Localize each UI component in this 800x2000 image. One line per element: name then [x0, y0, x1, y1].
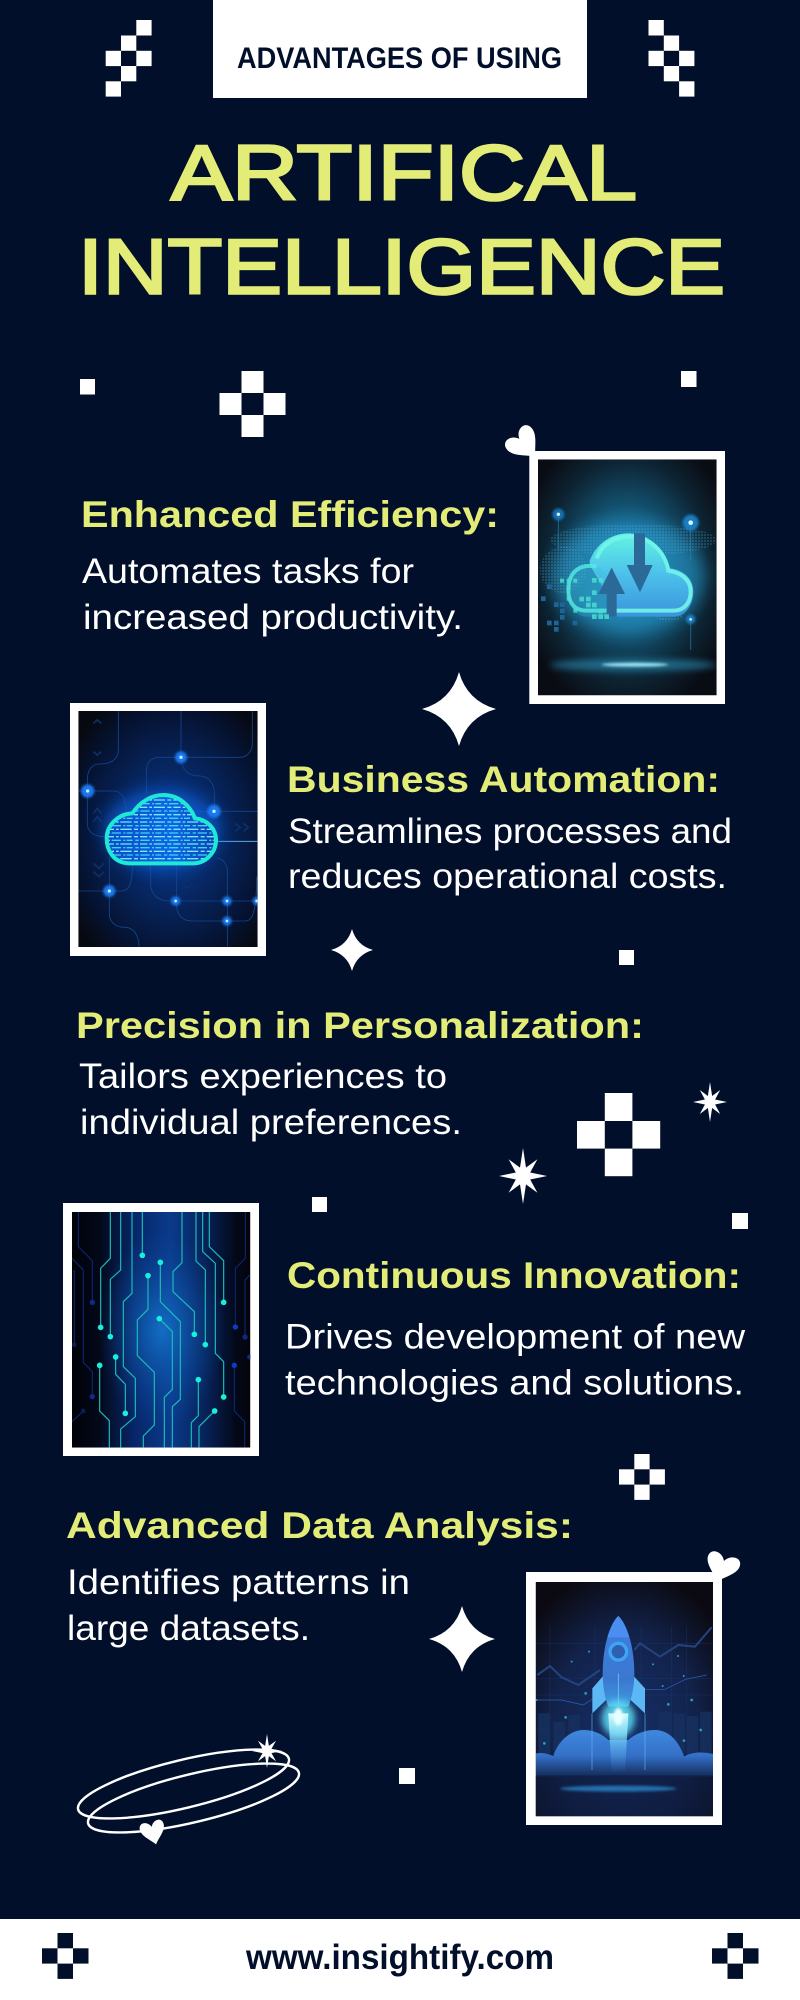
- text block: reduces operational costs.: [288, 857, 727, 896]
- icon: pixel cross: [220, 371, 286, 437]
- panel: advanced data analysis: [66, 1505, 742, 1825]
- icon: pixel cross small: [619, 1454, 665, 1500]
- panel: precision in personalization: [76, 1005, 644, 1142]
- panel: enhanced efficiency: [81, 422, 725, 704]
- title: ARTIFICAL: [171, 129, 637, 217]
- decorative square: [80, 379, 95, 394]
- text block: Automates tasks for: [82, 552, 414, 591]
- decorative four-point star: [331, 929, 373, 971]
- text block: large datasets.: [67, 1609, 310, 1648]
- image: circuit board: [63, 1203, 259, 1456]
- icon: footer pixel cross left: [42, 1933, 88, 1979]
- image: rocket launch: [526, 1572, 722, 1825]
- text block: Streamlines processes and: [288, 812, 732, 851]
- heading: Precision in Personalization:: [76, 1005, 644, 1046]
- heading: Advanced Data Analysis:: [66, 1505, 573, 1546]
- text block: individual preferences.: [80, 1103, 462, 1142]
- decorative eight-point star: [693, 1082, 727, 1122]
- decorative square: [619, 950, 634, 965]
- heading: Business Automation:: [287, 759, 720, 800]
- text block: technologies and solutions.: [285, 1364, 744, 1402]
- text block: [285, 1318, 746, 1402]
- footer url: www.insightify.com: [245, 1938, 554, 1977]
- heading: Enhanced Efficiency:: [81, 494, 499, 535]
- text block: Identifies patterns in: [67, 1563, 410, 1602]
- text block: Tailors experiences to: [79, 1057, 447, 1096]
- decorative four-point star: [422, 672, 496, 746]
- banner text: ADVANTAGES OF USING: [237, 42, 562, 75]
- icon: footer pixel cross right: [712, 1933, 758, 1979]
- icon: pixel cross: [577, 1093, 660, 1176]
- heading: Continuous Innovation:: [287, 1255, 741, 1296]
- icon: pixel column top right: [648, 20, 694, 97]
- icon: heart: [502, 422, 548, 468]
- panel: continuous innovation: [63, 1203, 746, 1456]
- icon: orbit rings with star and heart: [72, 1734, 305, 1847]
- decorative square: [399, 1768, 415, 1784]
- decorative square: [681, 371, 696, 387]
- image: cloud transfer: [529, 451, 725, 704]
- text block: increased productivity.: [83, 598, 463, 637]
- icon: heart: [701, 1550, 742, 1587]
- text block: Drives development of new: [285, 1318, 746, 1356]
- text block: [79, 1057, 462, 1142]
- image: data cloud: [70, 703, 266, 956]
- title: [78, 129, 725, 311]
- decorative eight-point star: [499, 1148, 547, 1204]
- text block: [288, 812, 732, 896]
- text block: [82, 552, 463, 637]
- footer band: [0, 1919, 800, 2000]
- panel: business automation: [70, 703, 732, 956]
- text block: [67, 1563, 410, 1648]
- icon: pixel column top left: [106, 20, 152, 97]
- title: INTELLIGENCE: [78, 223, 725, 311]
- decorative square: [312, 1197, 327, 1212]
- header banner: [213, 0, 587, 98]
- decorative four-point star: [429, 1606, 495, 1672]
- decorative square: [732, 1213, 748, 1229]
